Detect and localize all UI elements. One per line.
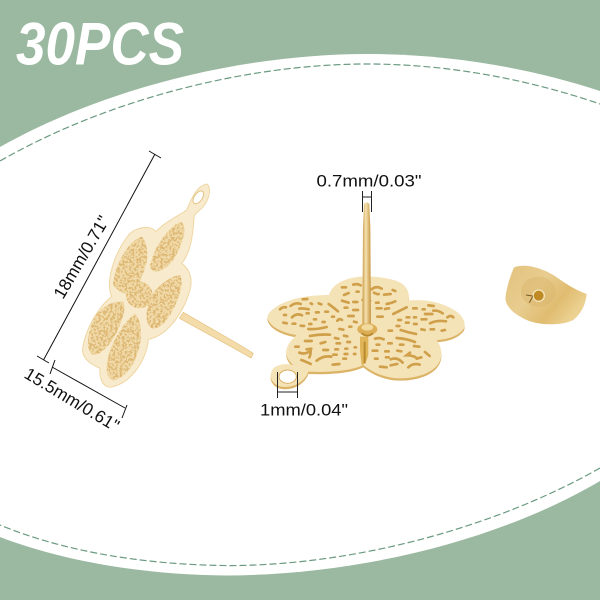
loop hole	[279, 370, 296, 383]
dimple	[521, 277, 556, 307]
plate face	[267, 277, 465, 387]
dimension: 15.500mm	[50, 360, 127, 418]
dimension: 1mm	[278, 372, 298, 398]
dimension: 0.7mm	[362, 191, 372, 212]
filigree petals	[88, 222, 184, 380]
clutch hole	[533, 290, 544, 301]
title: 30PCS	[16, 10, 184, 78]
plate edge	[267, 279, 465, 389]
clutch body	[505, 266, 587, 324]
pin	[179, 312, 253, 358]
label: 1mm: 1mm/0.04"	[260, 400, 348, 420]
pin post	[362, 202, 371, 329]
filigree cutouts	[280, 284, 453, 367]
label: 18mm/0.71: 18mm/0.71"	[49, 212, 113, 302]
pin clutch base and slot	[357, 202, 377, 365]
earring back clutch	[505, 266, 587, 324]
flower plate	[83, 184, 209, 387]
label: 0.7mm: 0.7mm/0.03"	[316, 172, 422, 190]
base collar	[357, 323, 377, 335]
dimension: 18mm	[37, 151, 161, 363]
label: 15.5mm/0.61: 15.5mm/0.61"	[21, 363, 123, 436]
slot	[360, 337, 368, 365]
hanging loop hole	[191, 189, 206, 206]
left earring: angled view	[83, 184, 253, 387]
hole tick	[526, 295, 533, 303]
center earring: front view	[267, 277, 465, 389]
